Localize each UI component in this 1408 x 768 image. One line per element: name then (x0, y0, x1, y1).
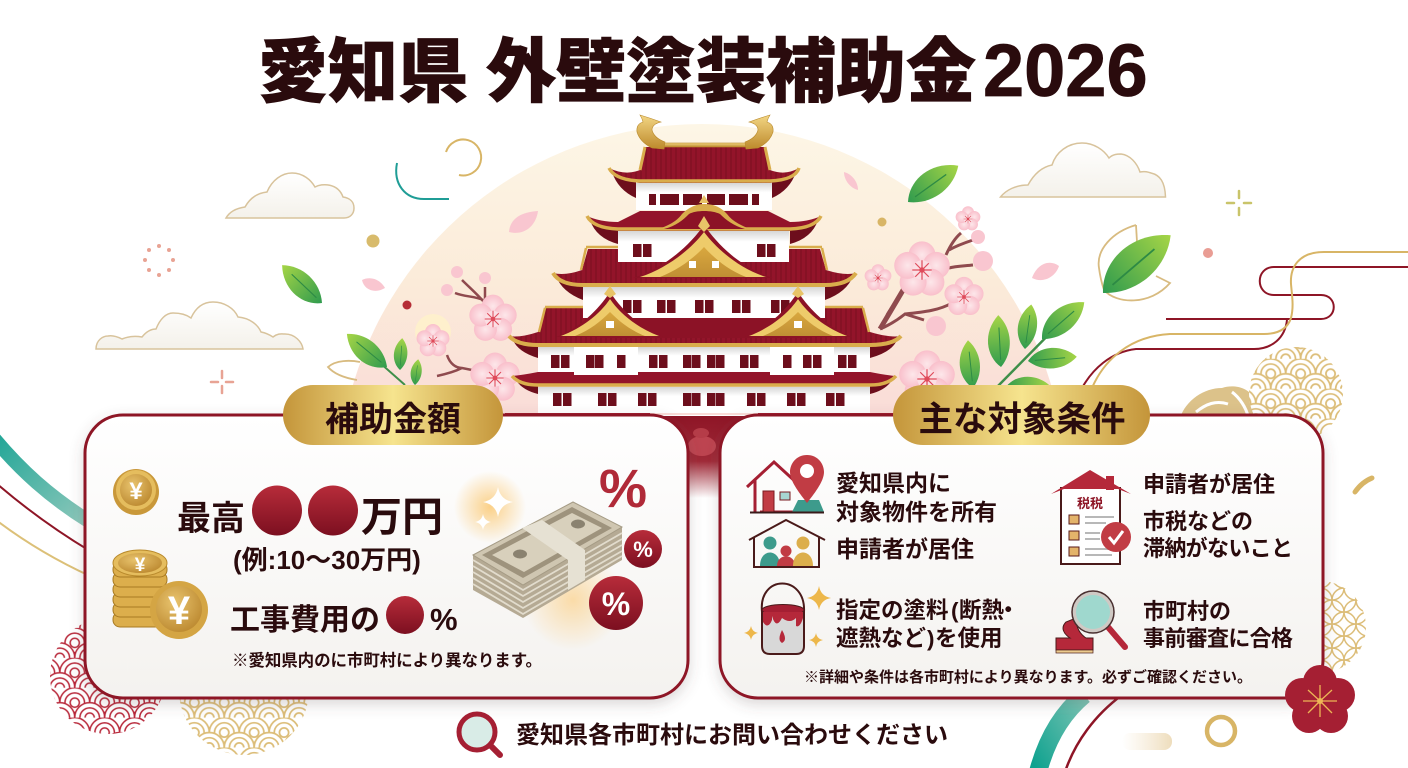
Nagoya castle (505, 115, 903, 416)
decoration: cherry branches right (865, 206, 993, 405)
text: own property in Aichi: 対象物件を所有 (836, 499, 997, 525)
text: maximum amount: 万円 (361, 494, 443, 540)
text: note: ※愛知県内のに市町村により異なります。 (232, 650, 542, 670)
text: own property in Aichi: 愛知県内に (836, 470, 951, 496)
text: percentage of construction cost: 工事費用の (230, 604, 380, 637)
decoration: left teal stripes (0, 436, 90, 576)
text: designated paint: 断熱 (959, 598, 1005, 623)
title: 愛知県 (258, 33, 468, 111)
icon: coin stack: ¥ (135, 555, 146, 576)
text: designated paint: を使用 (935, 626, 1003, 651)
decoration: bottom right curves (1038, 695, 1235, 768)
heading pill: subsidy amount: 補助金額 (325, 401, 461, 439)
text: applicant resides and no tax arrears: 滞納がないこと (1143, 536, 1293, 561)
castle: second tier (587, 211, 821, 262)
text: applicant resides and no tax arrears (1143, 472, 1293, 561)
decoration: teal arc and gold ring (396, 139, 481, 199)
castle: central gable (633, 216, 773, 278)
text: designated paint (836, 598, 1020, 651)
heading pill: subsidy amount (283, 385, 503, 445)
text: own property in Aichi (836, 470, 997, 525)
text: designated paint: ・ (997, 598, 1020, 623)
text: applicant resides and no tax arrears: 市税などの (1143, 509, 1253, 534)
text: example range: (例:10～30万円) (233, 545, 421, 575)
text: designated paint: ( (951, 598, 959, 623)
icon: coin stack (113, 550, 208, 639)
icon: plum blossom (1285, 665, 1355, 733)
text: percentage of construction cost: % (430, 602, 458, 637)
castle: left small gable (556, 286, 664, 337)
text: designated paint: ) (927, 626, 934, 651)
icon: paint can (744, 584, 831, 654)
contact line: 愛知県各市町村にお問い合わせください (516, 721, 948, 749)
icon: percent symbols: % (602, 586, 630, 622)
decoration: green leaves (274, 154, 1182, 399)
decoration: clouds (96, 143, 1166, 349)
heading pill: conditions: 主な対象条件 (918, 401, 1126, 439)
castle: fourth tier (509, 307, 901, 375)
icon: percent symbols: % (633, 537, 653, 562)
castle: golden shachi ornaments (637, 115, 773, 149)
castle: top tier (609, 147, 799, 210)
decoration: seigaiha patterns (50, 347, 1366, 755)
icon: tax document checklist (1051, 470, 1131, 564)
castle: right small gable (744, 286, 852, 337)
text: applicant resides and no tax arrears: 申請者が居住 (1143, 472, 1275, 497)
castle: upper curved gable (655, 195, 753, 230)
decoration: cherry branches left (415, 266, 520, 401)
icon: magnifier and stamp (1056, 591, 1125, 653)
text: applicant resides: 申請者が居住 (836, 536, 974, 562)
text: pre-screening (1143, 599, 1293, 651)
decoration: right flowing lines (1082, 252, 1408, 388)
heading pill: conditions (893, 385, 1150, 445)
sun disc behind castle (345, 124, 1059, 415)
castle: third tier (553, 247, 856, 318)
icon: single yen coin: ¥ (129, 478, 143, 505)
panel: main eligibility conditions (720, 385, 1323, 698)
icon: family in house (749, 520, 825, 567)
icon: single yen coin (113, 469, 159, 515)
icon: percent symbols (589, 459, 662, 630)
text: note: ※詳細や条件は各市町村により異なります。必ずご確認ください。 (804, 668, 1252, 686)
text: designated paint: 遮熱など (836, 626, 927, 651)
icon: coin stack: ¥ (168, 589, 191, 633)
text: pre-screening: 市町村の (1143, 599, 1231, 624)
title: 外壁塗装補助金 (486, 33, 976, 111)
decoration: dots and sparkles (143, 191, 1372, 492)
decoration: floating petals (362, 172, 1059, 291)
title: 2026 (983, 29, 1148, 112)
icon: bottom magnifier (459, 714, 500, 755)
icon: percent symbols: % (599, 459, 647, 519)
icon: house with map pin (747, 455, 824, 512)
text: maximum amount (177, 486, 443, 540)
castle: fifth tier (505, 372, 903, 416)
castle stone base (650, 416, 760, 498)
text: pre-screening: 事前審査に合格 (1143, 626, 1293, 651)
icon: stack of banknotes (454, 471, 623, 650)
text: percentage of construction cost (230, 596, 458, 637)
icon: tax document checklist: 税税 (1077, 496, 1103, 511)
panel: subsidy amount (85, 385, 688, 698)
text: designated paint: 指定の塗料 (836, 598, 949, 623)
text: maximum amount: 最高 (177, 500, 245, 538)
